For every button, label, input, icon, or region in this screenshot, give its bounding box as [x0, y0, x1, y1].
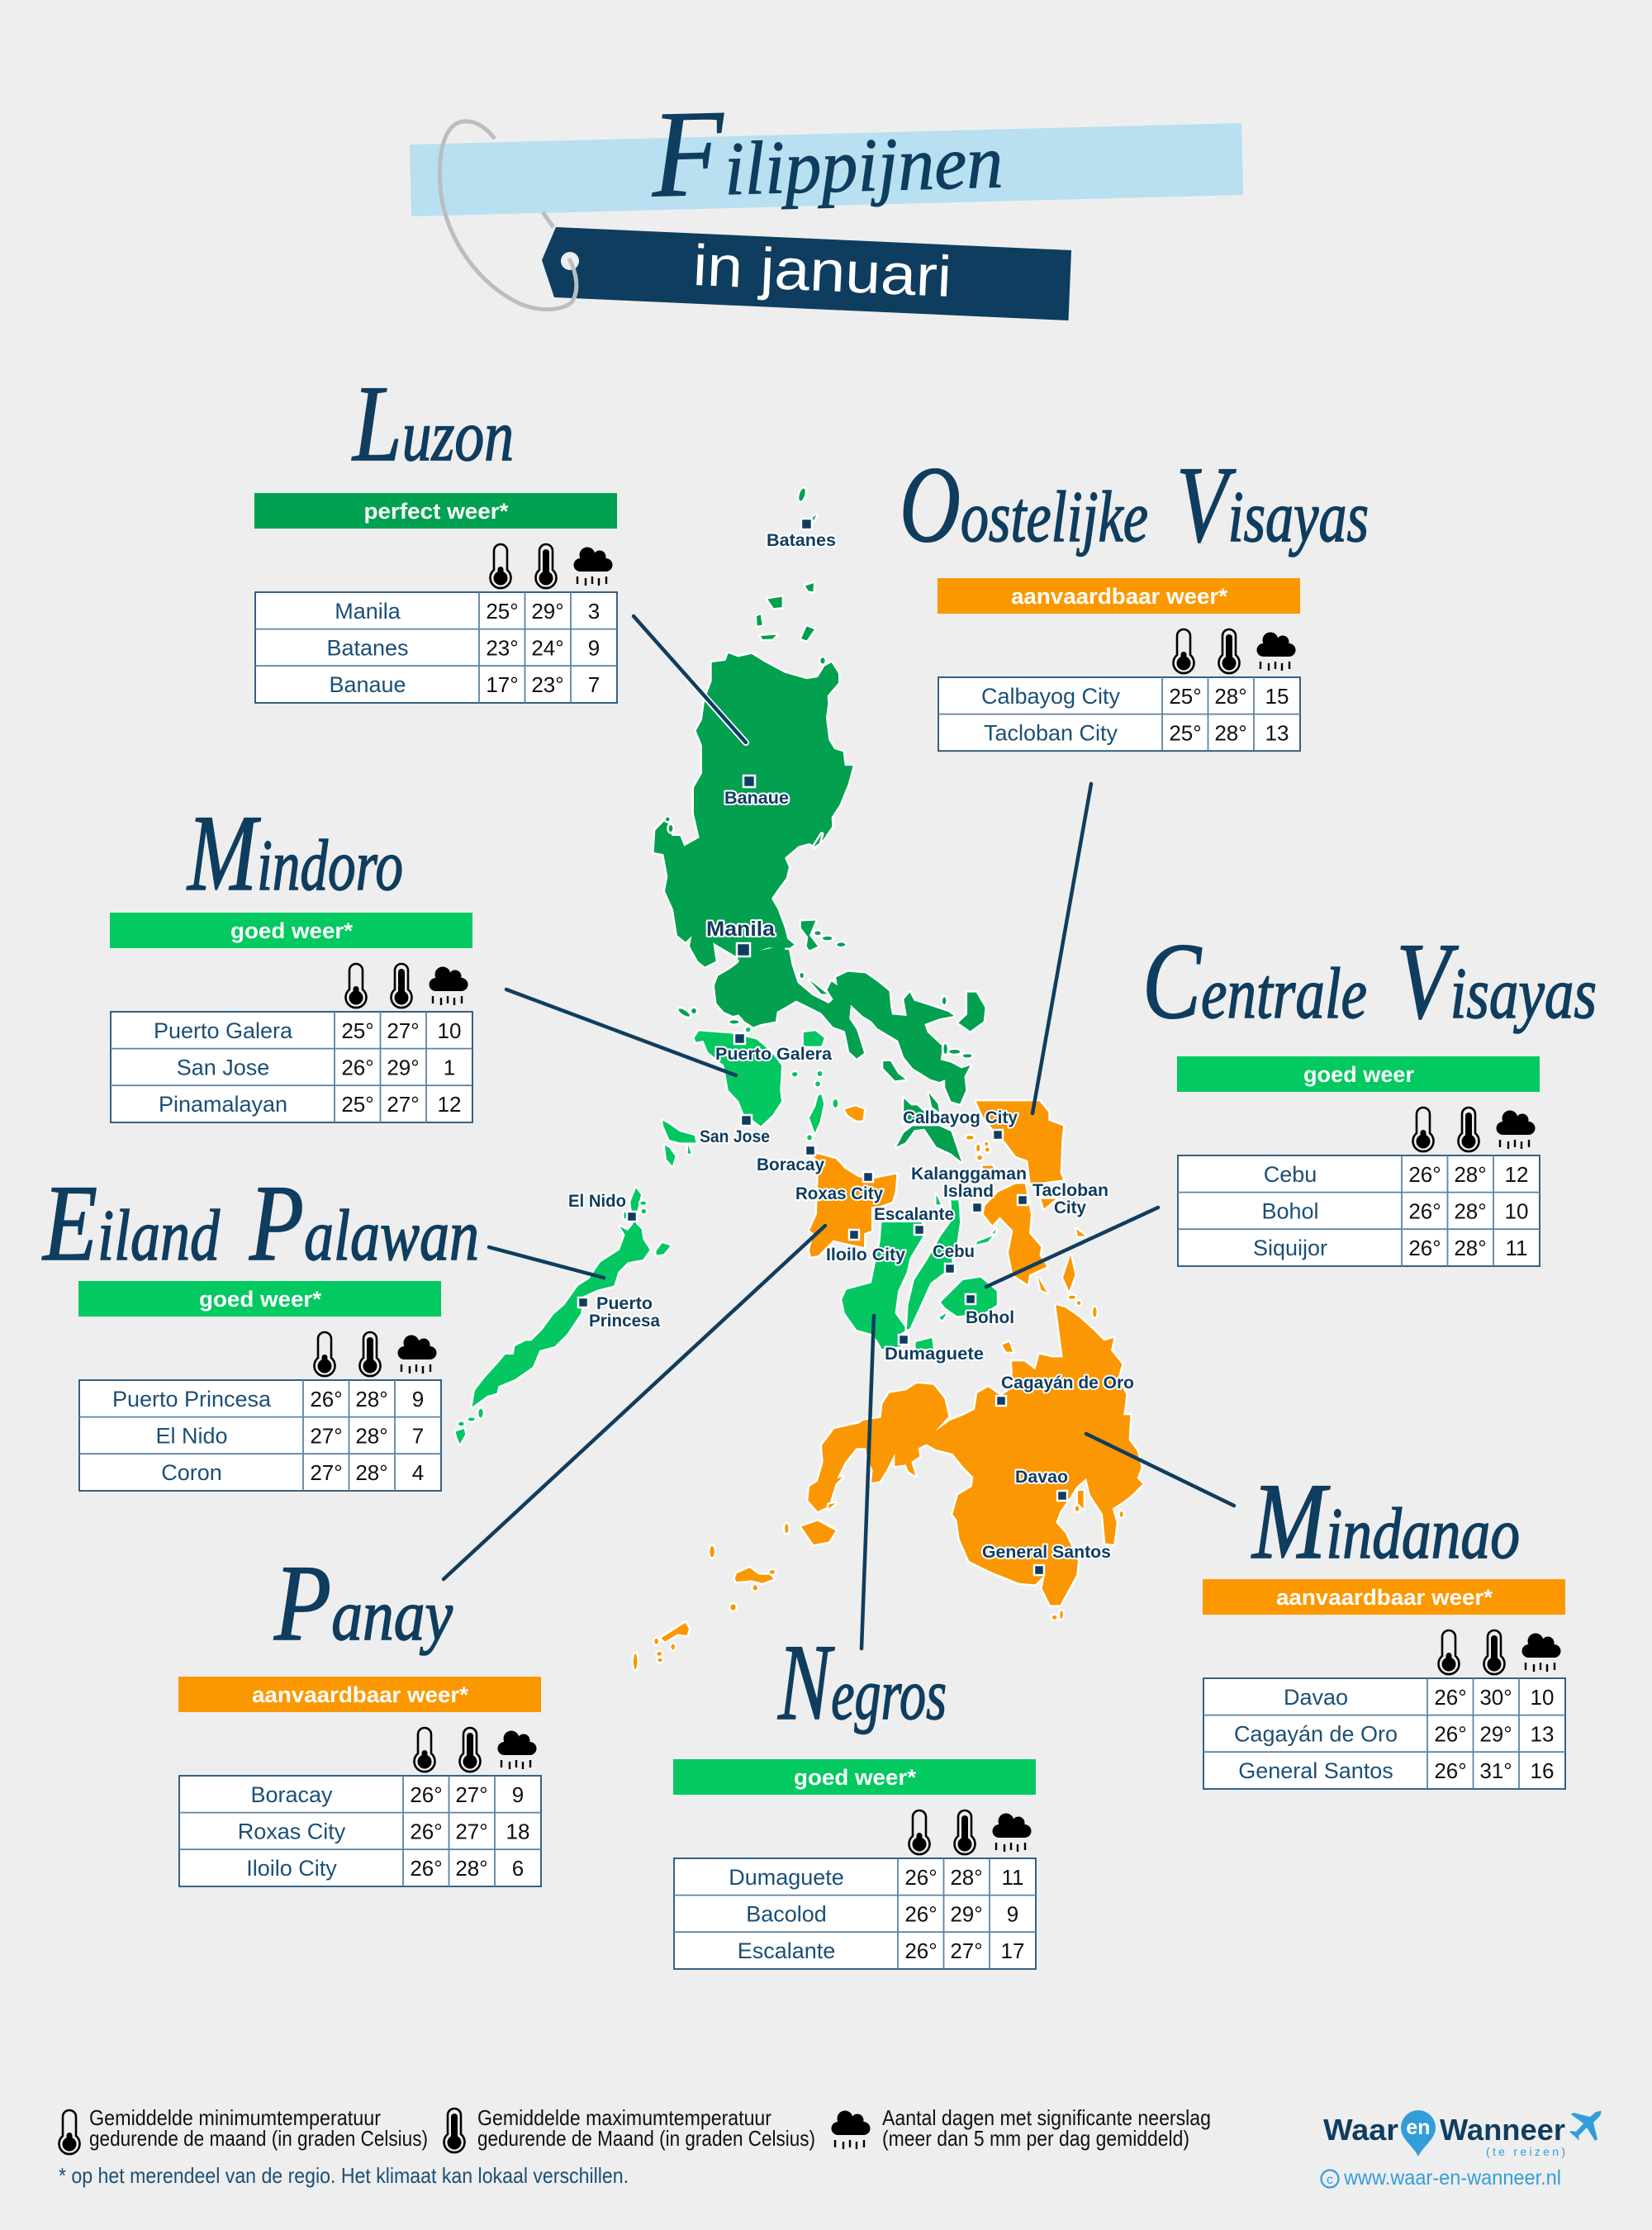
weather table: Luzon: 24°: [531, 636, 564, 661]
heading: Eiland Palawan: Eiland Palawan: [41, 1162, 479, 1283]
line: Mindanao: [1086, 1434, 1234, 1506]
weather table: Centrale Visayas: 11: [1505, 1236, 1528, 1260]
weather table: Centrale Visayas: 26°: [1408, 1162, 1441, 1187]
weather table: Centrale Visayas: Cebu: [1264, 1162, 1317, 1187]
line: Oostelijke Visayas: [1032, 784, 1091, 1113]
tag hole: [561, 252, 579, 270]
panel: Oostelijke Visayas: [900, 444, 1369, 751]
weather table: Eiland Palawan: 28°: [355, 1387, 388, 1412]
weather table: Oostelijke Visayas: 28°: [1214, 684, 1247, 709]
map: Mindanao: [785, 1305, 1142, 1620]
weather table: Eiland Palawan: 28°: [355, 1424, 388, 1449]
icon: copyright: [1322, 2171, 1338, 2187]
legend: minimum temperature: gedurende de maand (in graden Celsius): [89, 2126, 428, 2151]
weather table: Luzon: 25°: [486, 599, 519, 624]
weather table: Mindoro: 25°: [341, 1018, 374, 1043]
heading: Luzon: Luzon: [351, 363, 514, 484]
legend: minimum temperature: [59, 2105, 428, 2154]
weather table: Oostelijke Visayas: 28°: [1214, 721, 1247, 746]
string loop: [439, 121, 577, 310]
weather table: Oostelijke Visayas: 25°: [1169, 721, 1202, 746]
weather table: Panay: 26°: [410, 1782, 443, 1807]
weather table: Mindanao: 29°: [1479, 1722, 1512, 1747]
map: northern Luzon: [654, 487, 853, 985]
weather table: Negros: [673, 1759, 1036, 1969]
weather table: Centrale Visayas: 28°: [1454, 1162, 1487, 1187]
weather table: Panay: Roxas City: [238, 1820, 346, 1844]
weather table: Negros: 26°: [904, 1865, 938, 1890]
legend: minimum temperature: Gemiddelde minimumtemperatuur: [89, 2105, 381, 2130]
weather table: Eiland Palawan: 26°: [310, 1387, 343, 1412]
weather table: Luzon: 23°: [486, 636, 519, 661]
logo: Waar en Wanneer: [1322, 2110, 1601, 2190]
map city labels and markers: Iloilo City: [826, 1245, 905, 1264]
legend: rain days: (meer dan 5 mm per dag gemiddeld): [882, 2126, 1189, 2151]
map city labels and markers: Cebu: [933, 1242, 975, 1261]
map: Sulu archipelago: [634, 1546, 775, 1669]
weather table: Mindanao: Cagayán de Oro: [1234, 1722, 1398, 1747]
weather table: Eiland Palawan: goed weer*: [199, 1287, 322, 1312]
map city labels and markers: San Jose: [700, 1127, 770, 1146]
weather table: Mindanao: [1203, 1579, 1565, 1789]
weather table: Centrale Visayas: goed weer: [1303, 1062, 1414, 1087]
weather table: Panay: 28°: [455, 1856, 488, 1881]
logo: Waar en Wanneer: c: [1327, 2173, 1333, 2187]
map city labels and markers: Boracay: [757, 1155, 824, 1174]
panel: Mindanao: [1203, 1460, 1565, 1789]
weather table: Negros: 28°: [950, 1865, 983, 1890]
weather table: Centrale Visayas: [1177, 1056, 1540, 1266]
weather table: Mindanao: aanvaardbaar weer*: [1276, 1585, 1493, 1610]
weather table: Negros: 27°: [950, 1938, 983, 1963]
leader lines from panels to regions: [444, 616, 1234, 1649]
map city labels and markers: [568, 519, 1134, 1575]
footnote: * op het merendeel van de regio. Het klimaat kan lokaal verschillen.: [59, 2163, 629, 2188]
weather table: Luzon: Banaue: [329, 672, 406, 697]
weather table: Mindoro: 1: [444, 1056, 455, 1080]
weather table: Panay: 27°: [455, 1782, 488, 1807]
weather table: Centrale Visayas: Siquijor: [1253, 1236, 1327, 1260]
weather table: Negros: goed weer*: [794, 1765, 917, 1790]
weather table: Mindanao: 10: [1531, 1685, 1554, 1710]
weather table: Panay: aanvaardbaar weer*: [252, 1682, 469, 1707]
line: Panay: [444, 1226, 825, 1579]
map city labels and markers: Manila: [706, 918, 776, 941]
line: Centrale Visayas: [986, 1208, 1158, 1287]
weather table: Luzon: perfect weer*: [363, 499, 509, 524]
legend: maximum temperature: gedurende de Maand (in graden Celsius): [477, 2126, 815, 2151]
weather table: Luzon: 29°: [531, 599, 564, 624]
map city labels and markers: Tacloban: [1032, 1181, 1108, 1200]
light blue band: [410, 123, 1243, 216]
map: Mindoro, Negros, Cebu, Bohol: [662, 1027, 997, 1349]
line: Luzon: [634, 616, 746, 743]
logo: Waar en Wanneer: www.waar-en-wanneer.nl: [1343, 2166, 1561, 2190]
legend: rain days: [831, 2105, 1211, 2151]
weather table: Eiland Palawan: 27°: [310, 1424, 343, 1449]
weather table: Eiland Palawan: Coron: [161, 1460, 222, 1485]
legend: rain days: Aantal dagen met significante neerslag: [882, 2105, 1211, 2130]
weather table: Eiland Palawan: 4: [412, 1460, 424, 1485]
weather table: Mindanao: 26°: [1434, 1685, 1467, 1710]
weather table: Oostelijke Visayas: Calbayog City: [981, 684, 1121, 709]
icon: location pin: [1401, 2110, 1436, 2156]
heading: Mindoro: Mindoro: [186, 792, 403, 913]
weather table: Mindoro: 26°: [341, 1056, 374, 1080]
weather table: Mindanao: 13: [1531, 1722, 1554, 1747]
weather table: Oostelijke Visayas: 13: [1265, 721, 1289, 746]
weather table: Eiland Palawan: Puerto Princesa: [112, 1387, 272, 1412]
weather table: Panay: 18: [506, 1820, 529, 1844]
weather table: Negros: Bacolod: [746, 1902, 827, 1927]
map city labels and markers: Bohol: [966, 1308, 1014, 1327]
map: Panay, Samar, Leyte: [806, 1101, 1096, 1317]
weather table: Mindoro: 25°: [341, 1092, 374, 1117]
weather table: Mindanao: 26°: [1434, 1722, 1467, 1747]
weather table: Centrale Visayas: 26°: [1408, 1199, 1441, 1224]
weather table: Mindanao: 31°: [1479, 1758, 1512, 1783]
weather table: Oostelijke Visayas: aanvaardbaar weer*: [1011, 584, 1228, 609]
map city labels and markers: Roxas City: [795, 1184, 883, 1203]
panel: Panay: [178, 1542, 541, 1886]
weather table: Eiland Palawan: 9: [412, 1387, 424, 1412]
line: Palawan: [489, 1247, 604, 1278]
icon: airplane: [1569, 2111, 1601, 2141]
weather table: Negros: Dumaguete: [729, 1865, 844, 1890]
logo: Waar en Wanneer: (te reizen): [1486, 2145, 1565, 2158]
weather table: Panay: Iloilo City: [246, 1856, 337, 1881]
weather table: Mindoro: 27°: [387, 1018, 420, 1043]
weather table: Panay: 9: [512, 1782, 524, 1807]
weather table: Mindoro: Puerto Galera: [154, 1018, 293, 1043]
heading: Negros: Negros: [777, 1621, 947, 1743]
weather table: Panay: 6: [512, 1856, 524, 1881]
logo: Waar en Wanneer: en: [1406, 2116, 1431, 2139]
navy luggage tag: [542, 227, 1071, 320]
weather table: Negros: 29°: [950, 1902, 983, 1927]
weather table: Mindoro: 10: [438, 1018, 461, 1043]
main title: Filippijnen: [649, 77, 1004, 224]
weather table: Mindanao: General Santos: [1238, 1758, 1393, 1783]
heading: Centrale Visayas: Centrale Visayas: [1142, 920, 1597, 1041]
weather table: Negros: 9: [1007, 1902, 1018, 1927]
weather table: Mindanao: Davao: [1284, 1685, 1348, 1710]
panel: Eiland Palawan: [41, 1162, 479, 1491]
line: Mindoro: [506, 989, 736, 1075]
weather table: Negros: 26°: [904, 1938, 938, 1963]
map city labels and markers: Dumaguete: [885, 1345, 984, 1364]
map city labels and markers: Puerto Galera: [715, 1045, 832, 1064]
weather table: Negros: 17: [1001, 1938, 1024, 1963]
map city labels and markers: Davao: [1015, 1468, 1068, 1487]
weather table: Panay: 27°: [455, 1820, 488, 1844]
weather table: Mindanao: 26°: [1434, 1758, 1467, 1783]
weather table: Luzon: 17°: [486, 672, 519, 697]
map city labels and markers: El Nido: [568, 1192, 626, 1211]
weather table: Luzon: 9: [588, 636, 600, 661]
weather table: Oostelijke Visayas: 25°: [1169, 684, 1202, 709]
weather table: Mindoro: San Jose: [177, 1056, 269, 1080]
weather table: Luzon: 7: [588, 672, 600, 697]
weather table: Mindanao: 30°: [1479, 1685, 1512, 1710]
map city labels and markers: Calbayog City: [903, 1108, 1018, 1127]
map city labels and markers: Kalanggaman: [911, 1165, 1027, 1184]
legend: maximum temperature: Gemiddelde maximumtemperatuur: [477, 2105, 771, 2130]
heading: Oostelijke Visayas: Oostelijke Visayas: [900, 444, 1369, 565]
legend: [59, 2105, 1211, 2188]
panel: Negros: [673, 1621, 1036, 1969]
weather table: Mindanao: 16: [1531, 1758, 1554, 1783]
map city labels and markers: Banaue: [724, 789, 789, 808]
weather table: Negros: 26°: [904, 1902, 938, 1927]
weather table: Mindoro: goed weer*: [230, 918, 354, 943]
line: Negros: [862, 1316, 874, 1649]
weather table: Centrale Visayas: 28°: [1454, 1236, 1487, 1260]
weather table: Mindoro: 29°: [387, 1056, 420, 1080]
weather table: Negros: 11: [1001, 1865, 1024, 1890]
weather table: Centrale Visayas: 28°: [1454, 1199, 1487, 1224]
legend: maximum temperature: [444, 2105, 815, 2152]
weather table: Mindoro: [110, 913, 472, 1122]
panel: Luzon: [254, 363, 617, 703]
weather table: Eiland Palawan: [78, 1281, 441, 1491]
map city labels and markers: Escalante: [874, 1205, 954, 1224]
weather table: Luzon: [254, 493, 617, 703]
weather table: Luzon: 3: [588, 599, 600, 624]
map: Palawan: [456, 1188, 671, 1444]
subtitle: in januari: [691, 233, 953, 309]
map city labels and markers: Puerto: [596, 1294, 653, 1313]
panel: Mindoro: [110, 792, 472, 1122]
weather table: Luzon: Batanes: [326, 636, 409, 661]
map city labels and markers: General Santos: [982, 1543, 1111, 1562]
weather table: Negros: Escalante: [738, 1938, 835, 1963]
weather table: Eiland Palawan: 28°: [355, 1460, 388, 1485]
weather table: Panay: 26°: [410, 1820, 443, 1844]
weather table: Centrale Visayas: 12: [1505, 1162, 1528, 1187]
weather table: Oostelijke Visayas: Tacloban City: [984, 721, 1118, 746]
weather table: Mindoro: 27°: [387, 1092, 420, 1117]
weather table: Eiland Palawan: El Nido: [155, 1424, 228, 1449]
weather table: Oostelijke Visayas: 15: [1265, 684, 1289, 709]
heading: Mindanao: Mindanao: [1251, 1460, 1520, 1582]
weather table: Centrale Visayas: Bohol: [1261, 1199, 1319, 1224]
map city labels and markers: Island: [943, 1182, 994, 1201]
weather table: Mindoro: Pinamalayan: [159, 1092, 287, 1117]
map city labels and markers: Princesa: [589, 1312, 660, 1331]
map: patch joining Luzon parts: [735, 946, 787, 983]
weather table: Mindoro: 12: [438, 1092, 461, 1117]
map city labels and markers: City: [1054, 1198, 1086, 1217]
weather table: Luzon: Manila: [335, 599, 401, 624]
logo: Waar en Wanneer: Wanneer: [1440, 2113, 1565, 2147]
map city labels and markers: Batanes: [767, 531, 836, 550]
weather table: Centrale Visayas: 10: [1505, 1199, 1528, 1224]
map city labels and markers: Cagayán de Oro: [1001, 1374, 1134, 1393]
weather table: Eiland Palawan: 7: [412, 1424, 424, 1449]
weather table: Centrale Visayas: 26°: [1408, 1236, 1441, 1260]
weather table: Eiland Palawan: 27°: [310, 1460, 343, 1485]
title banner: Filippijnen in januari: [410, 77, 1243, 320]
map: southern Luzon and Bicol: [677, 950, 985, 1162]
weather table: Panay: Boracay: [250, 1782, 333, 1807]
panel: Centrale Visayas: [1142, 920, 1597, 1266]
weather table: Luzon: 23°: [531, 672, 564, 697]
weather table: Panay: 26°: [410, 1856, 443, 1881]
heading: Panay: Panay: [273, 1542, 453, 1663]
weather table: Oostelijke Visayas: [938, 578, 1300, 751]
logo: Waar en Wanneer: Waar: [1323, 2113, 1398, 2147]
weather table: Panay: [178, 1677, 541, 1886]
map of the Philippines: [456, 487, 1142, 1669]
